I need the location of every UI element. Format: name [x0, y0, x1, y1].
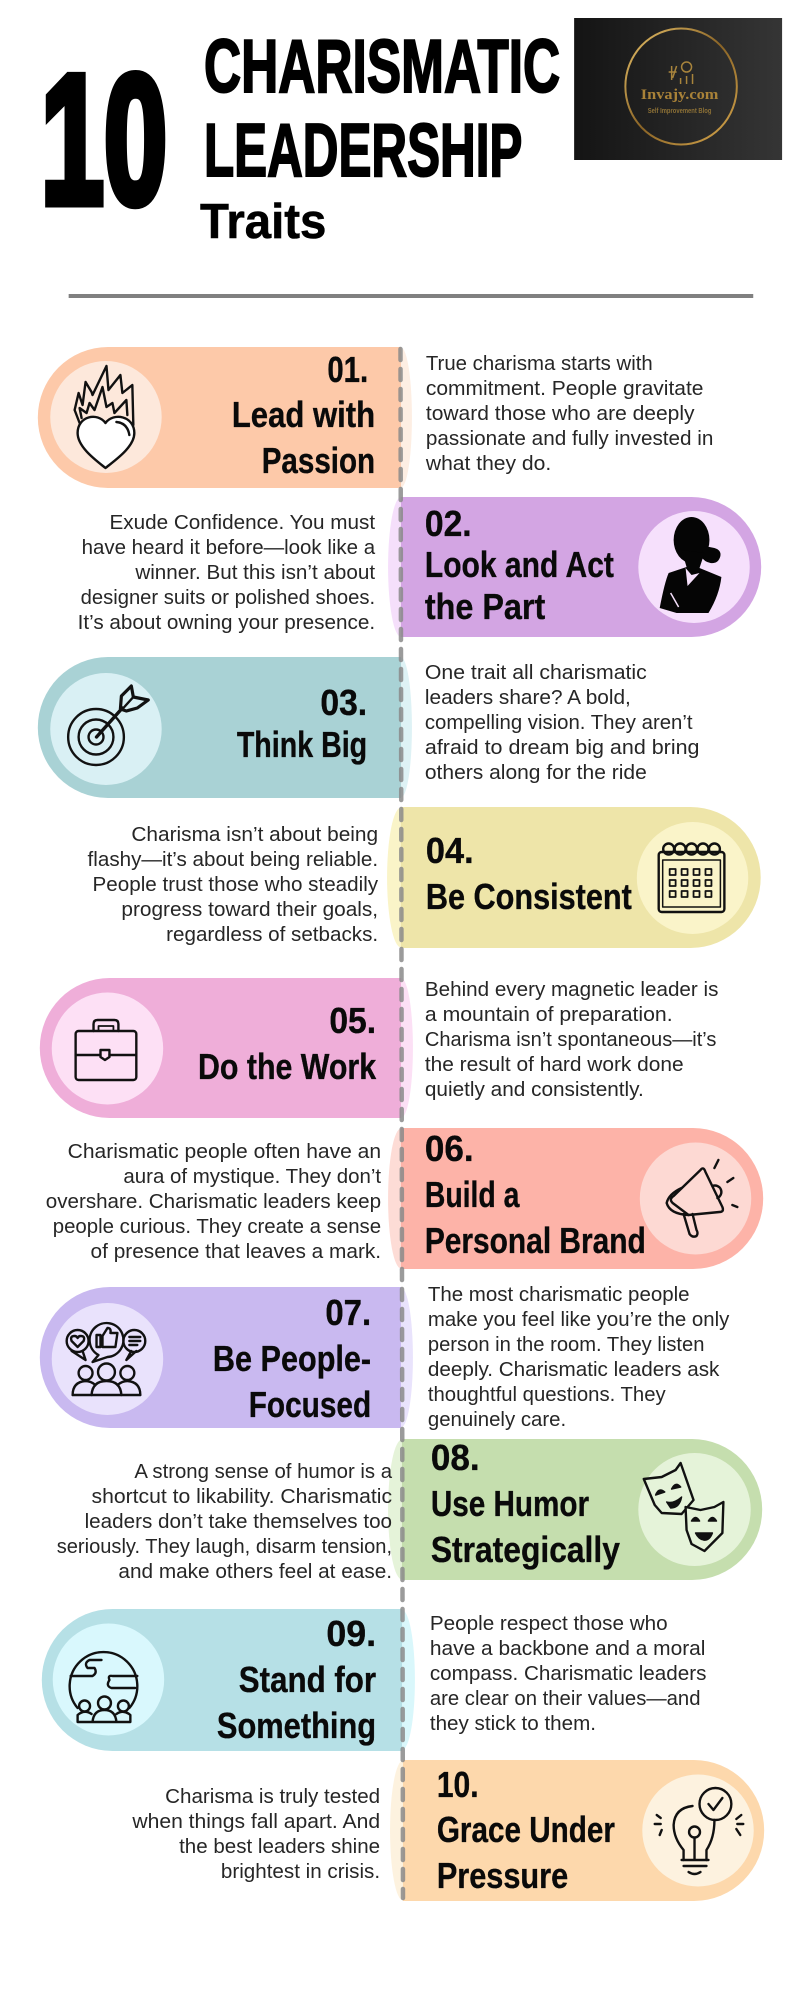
- heading: Look and Act: [425, 544, 614, 585]
- logo: Invajy.com: [641, 87, 719, 103]
- logo: Self Improvement Blog: [648, 108, 711, 115]
- heading: Focused: [249, 1384, 371, 1425]
- text block: trait 02 description: [78, 512, 376, 634]
- heading: Do the Work: [198, 1046, 376, 1087]
- title line: charismatic: CHARISMATIC: [204, 24, 560, 108]
- text block: trait 03 description: [425, 662, 700, 784]
- heading: [217, 1659, 376, 1746]
- text block: trait 04 description: regardless of setbacks.: [166, 924, 378, 946]
- text block: trait 09 description: [430, 1613, 706, 1735]
- text block: trait 06 description: aura of mystique. They don’t: [123, 1166, 382, 1188]
- panel: trait 01: [38, 347, 412, 488]
- title number 10: 10: [41, 37, 167, 242]
- text block: trait 03 description: afraid to dream big and bring: [425, 737, 700, 759]
- text block: trait 04 description: Charisma isn’t about being: [131, 824, 378, 846]
- text block: trait 06 description: Charismatic people often have an: [68, 1141, 381, 1163]
- text block: trait 07 description: genuinely care.: [428, 1409, 566, 1431]
- text block: trait 10 description: when things fall apart. And: [131, 1811, 380, 1833]
- panel: trait 06: [388, 1128, 763, 1269]
- text block: trait 02 description: Exude Confidence. You must: [109, 512, 376, 534]
- text block: trait 08 description: shortcut to likability. Charismatic: [92, 1486, 392, 1508]
- heading: Something: [217, 1705, 376, 1746]
- icon: light bulb with check: [655, 1788, 743, 1874]
- text block: trait 10 description: brightest in crisis.: [221, 1861, 380, 1883]
- text block: trait 10 description: the best leaders shine: [179, 1836, 380, 1858]
- text block: trait 01 description: what they do.: [425, 453, 551, 475]
- text block: trait 08 description: leaders don’t take themselves too: [85, 1511, 392, 1533]
- icon: theatre masks: [644, 1463, 723, 1551]
- number 09: 09.: [326, 1613, 376, 1654]
- heading: Grace Under: [437, 1809, 615, 1850]
- heading: [232, 394, 375, 481]
- text block: trait 06 description: people curious. They create a sense: [53, 1216, 381, 1238]
- number 05: 05.: [329, 1000, 376, 1041]
- panel: trait 02: [388, 497, 761, 637]
- text block: trait 07 description: thoughtful questions. They: [428, 1384, 666, 1406]
- text block: trait 01 description: [425, 353, 713, 475]
- number 02: 02.: [425, 503, 472, 544]
- icon: flaming heart: [75, 366, 134, 468]
- text block: trait 03 description: others along for the ride: [425, 762, 647, 784]
- icon: globe with people: [70, 1652, 137, 1722]
- text block: trait 01 description: passionate and fully invested in: [426, 428, 713, 450]
- number 06: 06.: [425, 1128, 474, 1169]
- text block: trait 07 description: deeply. Charismatic leaders ask: [428, 1359, 719, 1381]
- text block: trait 05 description: [425, 979, 718, 1101]
- icon: target with arrow: [68, 686, 148, 765]
- heading: Strategically: [431, 1529, 620, 1570]
- text block: trait 09 description: they stick to them.: [430, 1713, 596, 1735]
- text block: trait 09 description: compass. Charismatic leaders: [430, 1663, 706, 1685]
- text block: trait 10 description: Charisma is truly tested: [165, 1786, 380, 1808]
- text block: trait 05 description: Behind every magnetic leader is: [425, 979, 718, 1001]
- heading: Passion: [262, 440, 375, 481]
- title line: traits: Traits: [200, 195, 326, 249]
- panel: trait 04: [387, 807, 761, 948]
- number 10: 10.: [437, 1764, 479, 1805]
- heading: Build a: [425, 1174, 520, 1215]
- text block: trait 01 description: toward those who are deeply: [426, 403, 695, 425]
- text block: trait 07 description: make you feel like you’re the only: [428, 1309, 729, 1331]
- text block: trait 06 description: of presence that leaves a mark.: [91, 1241, 381, 1263]
- text block: trait 07 description: [428, 1284, 729, 1431]
- icon: calendar: [659, 844, 724, 912]
- panel: trait 09: [42, 1609, 415, 1751]
- text block: trait 01 description: True charisma starts with: [426, 353, 653, 375]
- text block: trait 05 description: Charisma isn’t spontaneous—it’s: [425, 1029, 716, 1051]
- text block: trait 06 description: overshare. Charismatic leaders keep: [46, 1191, 381, 1213]
- text block: trait 02 description: winner. But this isn’t about: [134, 562, 376, 584]
- icon: people with speech bubbles: [67, 1323, 145, 1395]
- heading: Be People-: [213, 1338, 371, 1379]
- text block: trait 08 description: [57, 1461, 393, 1583]
- text block: trait 02 description: It’s about owning your presence.: [78, 612, 375, 634]
- text block: trait 02 description: designer suits or polished shoes.: [81, 587, 375, 609]
- number 04: 04.: [426, 830, 474, 871]
- number 01: 01.: [327, 349, 368, 390]
- panel: trait 03: [38, 657, 412, 798]
- text block: trait 08 description: A strong sense of humor is a: [134, 1461, 393, 1483]
- title: [41, 24, 560, 249]
- text block: trait 05 description: a mountain of preparation.: [425, 1004, 673, 1026]
- text block: trait 09 description: People respect those who: [430, 1613, 668, 1635]
- text block: trait 09 description: have a backbone and a moral: [430, 1638, 705, 1660]
- heading: Lead with: [232, 394, 375, 435]
- heading: [213, 1338, 371, 1425]
- icon: businesswoman silhouette: [660, 517, 721, 613]
- text block: trait 07 description: person in the room. They listen: [428, 1334, 704, 1356]
- panel: trait 10: [390, 1760, 764, 1901]
- heading: [437, 1809, 615, 1896]
- heading: [425, 544, 614, 627]
- text block: trait 01 description: commitment. People gravitate: [426, 378, 703, 400]
- panel: trait 07: [40, 1287, 413, 1428]
- text block: trait 03 description: leaders share? A bold,: [425, 687, 631, 709]
- text block: trait 09 description: are clear on their values—and: [430, 1688, 700, 1710]
- heading: Pressure: [437, 1855, 568, 1896]
- text block: trait 04 description: [88, 824, 378, 946]
- heading: Use Humor: [431, 1483, 589, 1524]
- icon: briefcase: [76, 1020, 136, 1080]
- heading: [431, 1483, 620, 1570]
- title line: leadership: LEADERSHIP: [204, 108, 522, 192]
- text block: trait 08 description: seriously. They laugh, disarm tension,: [57, 1536, 392, 1558]
- heading: Think Big: [237, 724, 367, 765]
- heading: Stand for: [239, 1659, 376, 1700]
- panel: trait 08: [388, 1437, 762, 1580]
- text block: trait 06 description: [46, 1141, 382, 1263]
- icon: megaphone: [667, 1160, 737, 1237]
- heading: [425, 1174, 646, 1261]
- heading: Be Consistent: [426, 876, 632, 917]
- panel: trait 05: [40, 978, 413, 1118]
- text block: trait 04 description: flashy—it’s about being reliable.: [88, 849, 378, 871]
- number 07: 07.: [325, 1292, 371, 1333]
- text block: trait 04 description: People trust those who steadily: [93, 874, 378, 896]
- text block: trait 04 description: progress toward their goals,: [121, 899, 378, 921]
- text block: trait 08 description: and make others feel at ease.: [118, 1561, 392, 1583]
- heading: the Part: [425, 586, 545, 627]
- number 03: 03.: [320, 682, 367, 723]
- text block: trait 05 description: the result of hard work done: [425, 1054, 684, 1076]
- number 08: 08.: [431, 1437, 480, 1478]
- text block: trait 03 description: compelling vision. They aren’t: [425, 712, 693, 734]
- text block: trait 03 description: One trait all charismatic: [425, 662, 647, 684]
- text block: trait 02 description: have heard it before—look like a: [82, 537, 376, 559]
- logo: [574, 18, 782, 160]
- text block: trait 05 description: quietly and consistently.: [425, 1079, 644, 1101]
- heading: Personal Brand: [425, 1220, 646, 1261]
- text block: trait 10 description: [131, 1786, 380, 1883]
- text block: trait 07 description: The most charismatic people: [428, 1284, 690, 1306]
